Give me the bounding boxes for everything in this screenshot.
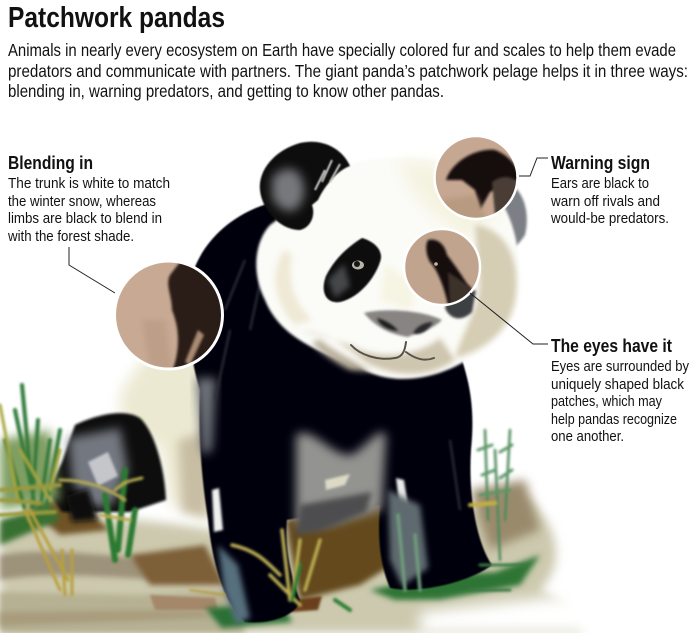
left eye patch — [324, 238, 381, 302]
callout circle: limb detail — [114, 261, 225, 372]
label: blending in: The trunk is white to match — [8, 176, 170, 192]
label: the eyes have it: The eyes have it — [551, 336, 672, 356]
title: Patchwork pandas — [8, 2, 225, 34]
label: warning sign: Warning sign — [551, 153, 650, 173]
label: the eyes have it: uniquely shaped black — [551, 377, 685, 393]
label: warning sign — [550, 153, 669, 227]
label: warning sign: would-be predators. — [550, 211, 669, 227]
callout circle: eye detail — [404, 229, 480, 305]
label: blending in: the winter snow, whereas — [8, 194, 156, 210]
intro text: blending in, warning predators, and getting to know other pandas. — [8, 81, 444, 101]
left ear — [260, 142, 350, 230]
nose and mouth — [351, 310, 442, 360]
leader line: blending in — [69, 247, 115, 293]
intro text — [8, 40, 688, 101]
label: blending in: with the forest shade. — [7, 229, 134, 245]
label: the eyes have it — [551, 336, 690, 445]
haunch — [48, 413, 166, 522]
grass clumps — [0, 385, 525, 610]
label: the eyes have it: patches, which may — [551, 394, 663, 410]
black body and legs — [189, 203, 492, 624]
label: blending in — [7, 153, 170, 245]
leader line: warning sign — [519, 158, 548, 176]
callout circle: ear detail — [434, 136, 520, 225]
leader line: the eyes have it — [470, 293, 548, 344]
label: warning sign: warn off rivals and — [550, 194, 660, 210]
right eye patch lower — [445, 290, 476, 318]
illustration: panda on forest ground — [0, 142, 620, 633]
ground — [0, 480, 620, 633]
label: blending in: Blending in — [8, 153, 93, 173]
head — [256, 157, 519, 379]
label: the eyes have it: help pandas recognize — [551, 412, 677, 428]
label: warning sign: Ears are black to — [551, 176, 649, 192]
label: the eyes have it: one another. — [551, 429, 624, 445]
label: blending in: limbs are black to blend in — [8, 211, 162, 227]
right ear — [495, 182, 527, 252]
cream torso behind — [120, 340, 230, 520]
